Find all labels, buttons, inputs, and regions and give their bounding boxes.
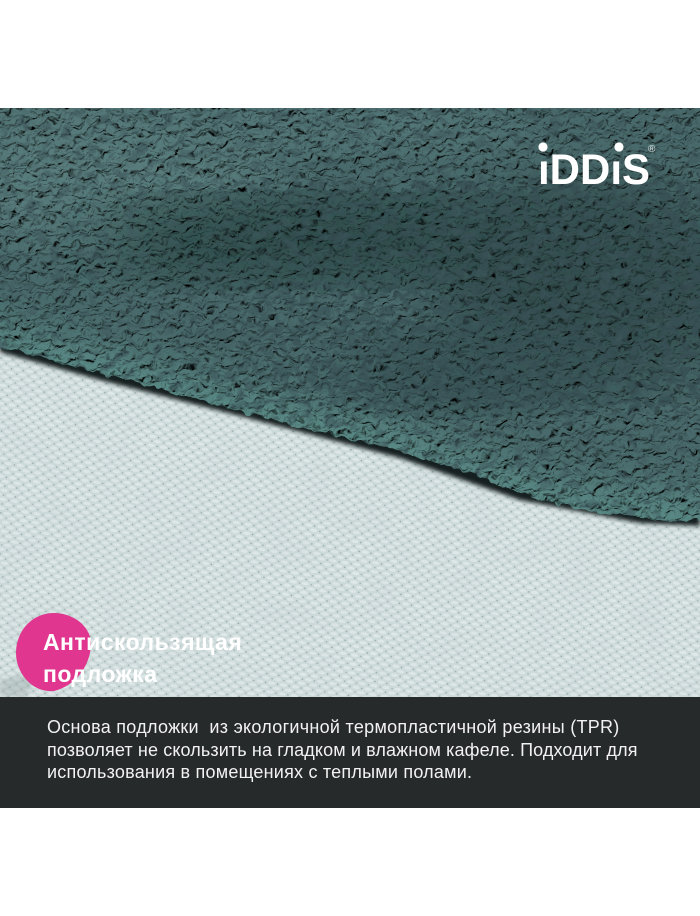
description text: позволяет не скользить на гладком и влажном кафеле. Подходит для (47, 740, 638, 760)
heading: anti-slip backing: Антискользящая (43, 629, 242, 655)
product photo: rug and backing (0, 108, 700, 697)
shadow under rug (0, 340, 700, 526)
heading: anti-slip backing (43, 629, 242, 687)
description text (47, 717, 638, 782)
description text: Основа подложки из экологичной термопластичной резины (TPR) (47, 717, 620, 737)
heading: anti-slip backing: подложка (43, 661, 158, 687)
backing fabric (0, 108, 700, 697)
dark streaks at lower-left of backing (0, 672, 40, 697)
rug pile (0, 108, 700, 522)
dark description band (0, 697, 700, 808)
logo: IDDIS: ® (648, 144, 656, 155)
description text: использования в помещениях с теплыми полами. (47, 762, 472, 782)
icon: pink blob accent (16, 613, 91, 692)
